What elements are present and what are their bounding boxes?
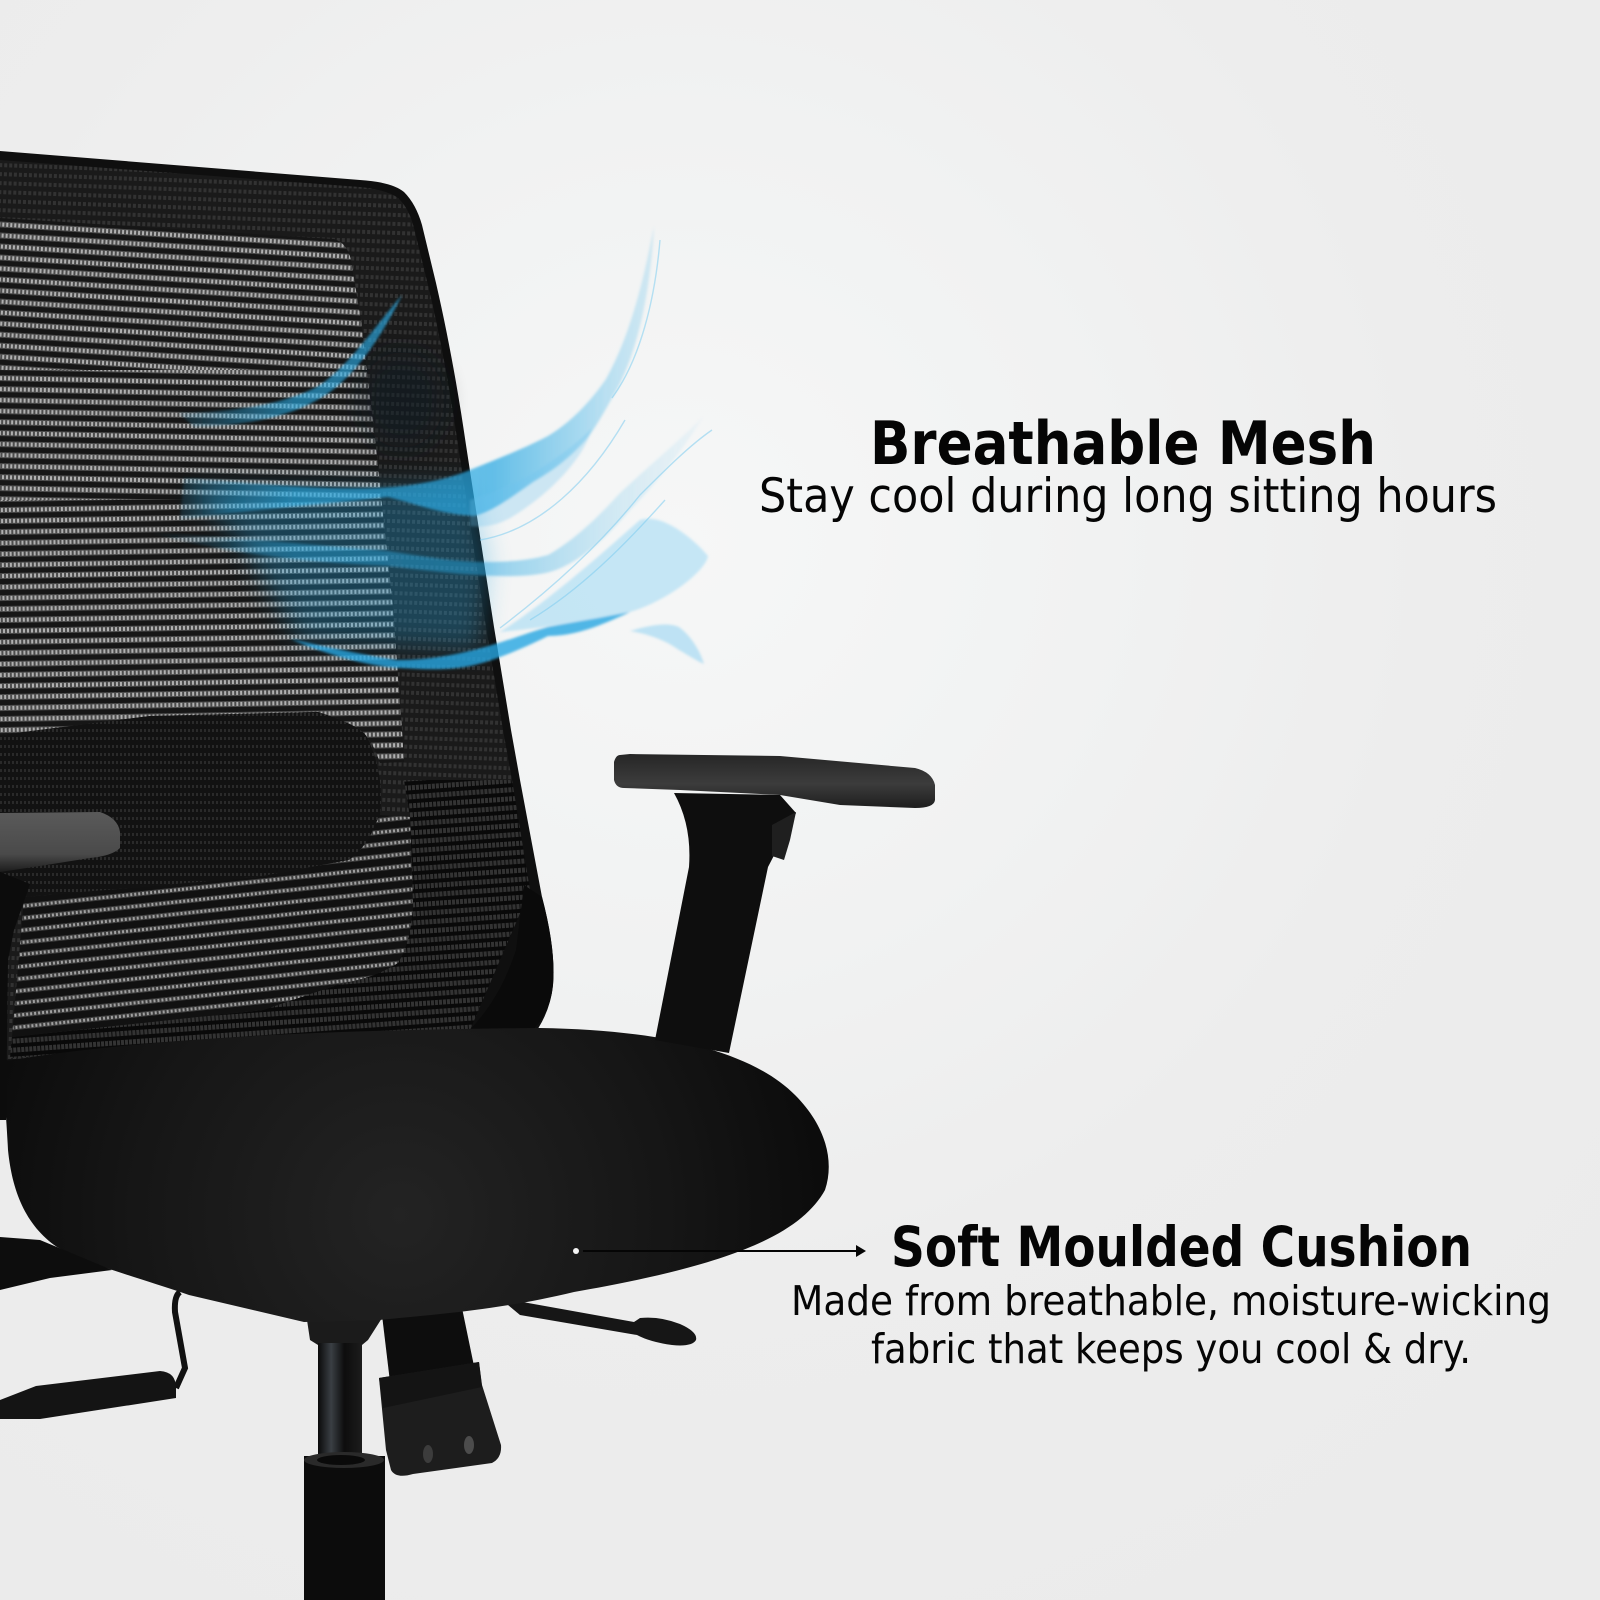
backrest outer mesh (0, 160, 526, 1060)
chair gas lift (304, 1318, 385, 1600)
mesh blue haze (190, 485, 490, 650)
subtext: cushion line one: Made from breathable, moisture-wicking (791, 1277, 1551, 1325)
arrow: cushion pointer (573, 1245, 866, 1257)
subtext: breathable mesh: Stay cool during long sitting hours (759, 469, 1497, 524)
right armrest pad (614, 754, 935, 808)
seat cushion (0, 1028, 829, 1322)
backrest frame (0, 151, 554, 1075)
heading: breathable mesh: Breathable Mesh (870, 409, 1376, 479)
right armrest post (655, 793, 796, 1053)
tilt lever boot (379, 1308, 501, 1476)
under seat plate (0, 1237, 112, 1290)
lumbar support (0, 712, 381, 925)
air flow wisps (145, 226, 712, 669)
dark swirl on mesh (360, 352, 444, 448)
mesh light panel lower (12, 815, 413, 1036)
thin air filaments (480, 240, 712, 628)
lower outer mesh (10, 780, 530, 1058)
mesh light panel upper (0, 200, 420, 770)
heading: soft moulded cushion: Soft Moulded Cushion (891, 1215, 1472, 1279)
left lever (0, 1292, 185, 1419)
chair (0, 151, 935, 1600)
callout: breathable mesh (759, 409, 1497, 524)
backrest side panel (466, 885, 554, 1034)
left armrest pad (0, 812, 120, 872)
right lever (508, 1301, 696, 1345)
callout: soft moulded cushion (791, 1215, 1551, 1373)
left armrest post (0, 872, 30, 1120)
armrest lever (772, 812, 796, 860)
subtext: cushion line two: fabric that keeps you cool & dry. (871, 1325, 1471, 1373)
